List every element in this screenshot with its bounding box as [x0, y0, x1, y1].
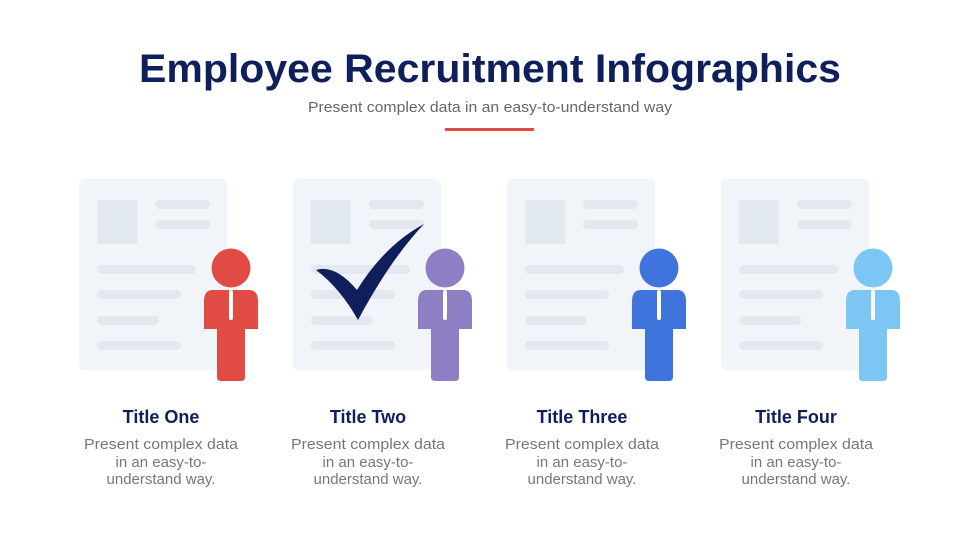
- document card three: [507, 179, 655, 370]
- document card two: [293, 179, 441, 370]
- text two: Present complex data: [291, 436, 446, 453]
- icon: person light blue: [846, 248, 900, 381]
- text one: understand way.: [107, 471, 215, 488]
- subtitle: Present complex data in an easy-to-understand way: [308, 99, 673, 116]
- text two: understand way.: [314, 471, 422, 488]
- document card four: [721, 179, 869, 370]
- text three: [505, 436, 660, 488]
- text one: [84, 436, 239, 488]
- panel: one: [79, 179, 258, 488]
- title one: Title One: [123, 407, 199, 427]
- text two: in an easy-to-: [323, 454, 413, 471]
- icon: person red: [204, 248, 258, 381]
- text three: in an easy-to-: [537, 454, 627, 471]
- title four: Title Four: [755, 407, 837, 427]
- title: Employee Recruitment Infographics: [139, 47, 841, 91]
- text four: understand way.: [742, 471, 850, 488]
- icon: checkmark: [316, 224, 424, 320]
- title two: Title Two: [330, 407, 406, 427]
- icon: person purple: [418, 248, 472, 381]
- text three: Present complex data: [505, 436, 660, 453]
- icon: person blue: [632, 248, 686, 381]
- text three: understand way.: [528, 471, 636, 488]
- red accent line: [445, 128, 534, 131]
- panel: four: [719, 179, 900, 488]
- title three: Title Three: [537, 407, 627, 427]
- text two: [291, 436, 446, 488]
- text four: in an easy-to-: [751, 454, 841, 471]
- text one: Present complex data: [84, 436, 239, 453]
- text one: in an easy-to-: [116, 454, 206, 471]
- panel: three: [505, 179, 686, 488]
- document card one: [79, 179, 227, 370]
- text four: Present complex data: [719, 436, 874, 453]
- panel: two: [291, 179, 472, 488]
- text four: [719, 436, 874, 488]
